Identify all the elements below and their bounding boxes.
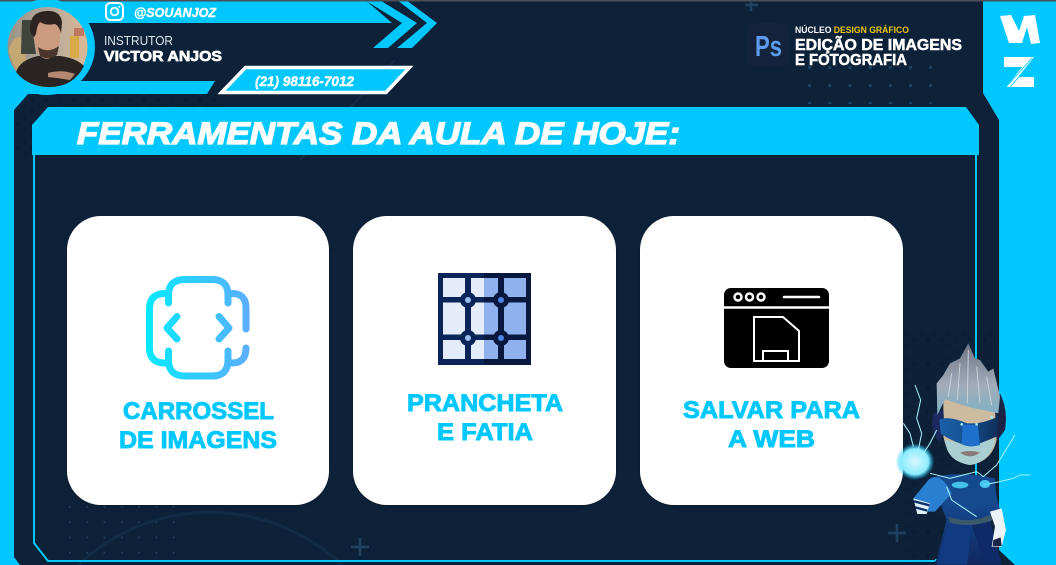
right cyan frame bbox=[983, 2, 1056, 565]
label bbox=[119, 398, 277, 454]
instructor photo bbox=[0, 0, 95, 95]
course title: E FOTOGRAFIA bbox=[795, 52, 907, 69]
label: SALVAR PARA bbox=[683, 397, 860, 424]
card: prancheta e fatia bbox=[353, 216, 616, 505]
left and top cyan frame bbox=[0, 2, 392, 565]
instagram handle bbox=[106, 3, 217, 20]
label: E FATIA bbox=[437, 419, 533, 446]
card: carrossel de imagens bbox=[67, 216, 329, 505]
mascot: superhero with lightning bbox=[896, 343, 1030, 565]
card: salvar para a web bbox=[640, 216, 903, 505]
course title bbox=[795, 36, 962, 69]
inner panel border bbox=[34, 155, 976, 561]
course title: EDIÇÃO DE IMAGENS bbox=[795, 36, 962, 54]
course category: NÚCLEO DESIGN GRÁFICO bbox=[795, 24, 909, 35]
icon: photoshop: Ps bbox=[755, 31, 782, 63]
label: PRANCHETA bbox=[407, 390, 563, 417]
label: CARROSSEL bbox=[123, 398, 274, 425]
phone badge bbox=[222, 68, 410, 92]
label bbox=[683, 397, 860, 453]
instagram handle: @SOUANJOZ bbox=[134, 5, 217, 20]
header chevrons bbox=[367, 2, 437, 48]
icon: save for web bbox=[724, 288, 829, 368]
instructor label: INSTRUTOR bbox=[104, 34, 173, 48]
label bbox=[407, 390, 563, 446]
icon: photoshop bbox=[747, 23, 789, 67]
icon: slice grid bbox=[438, 273, 531, 365]
course logo bbox=[747, 23, 962, 69]
heading: FERRAMENTAS DA AULA DE HOJE: bbox=[77, 115, 680, 151]
phone badge: (21) 98116-7012 bbox=[255, 73, 354, 89]
instructor name: VICTOR ANJOS bbox=[104, 48, 222, 65]
title banner bbox=[32, 107, 979, 155]
label: DE IMAGENS bbox=[119, 427, 277, 454]
brand logo bbox=[1000, 15, 1040, 87]
icon: carousel bbox=[150, 280, 246, 376]
label: A WEB bbox=[728, 426, 815, 453]
